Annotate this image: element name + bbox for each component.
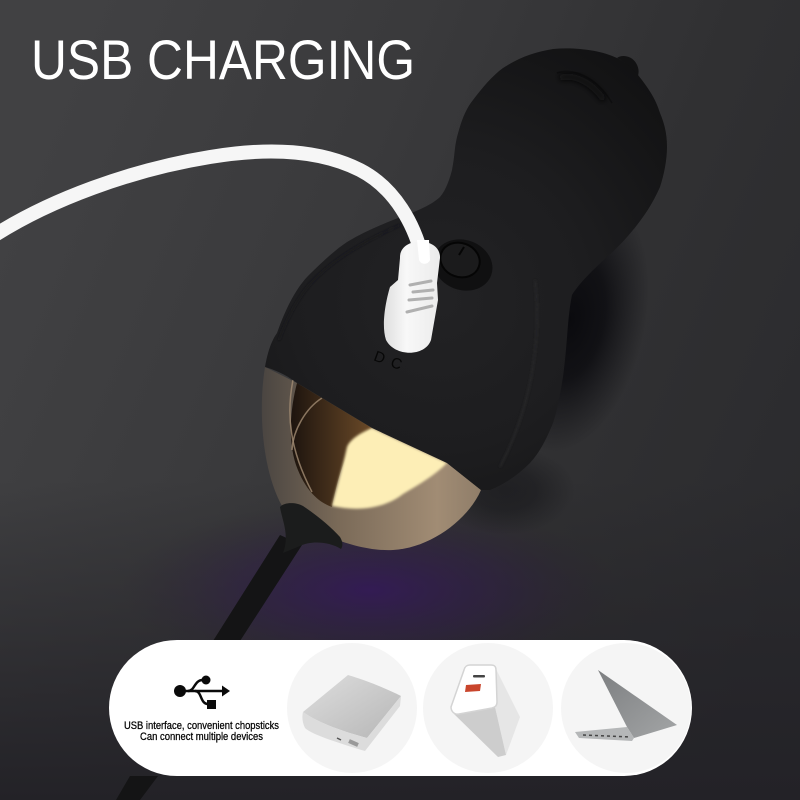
- device: gold base: [262, 367, 481, 550]
- ear: [557, 71, 612, 103]
- usb caption: USB interface, convenient chopsticks: [124, 720, 279, 732]
- white USB cable: [0, 151, 423, 260]
- panel: compatible devices: [109, 640, 692, 776]
- gold reflection: glowing highlight: [332, 428, 447, 509]
- usb caption: [124, 720, 279, 743]
- circle: laptop: [561, 643, 691, 773]
- circle: wall charger: [423, 643, 553, 773]
- device: silicone body and head: [265, 48, 667, 490]
- gold reflection: dark inner: [291, 383, 372, 507]
- circle: power bank: [287, 643, 417, 773]
- tail stem of device: [116, 535, 302, 800]
- usb caption: Can connect multiple devices: [140, 731, 263, 743]
- side crease: [500, 280, 537, 467]
- DC plug: [384, 240, 440, 353]
- tail flare: [280, 503, 342, 553]
- DC label: DC: [372, 348, 411, 376]
- icon: usb symbol: [174, 676, 230, 709]
- body rim fold: [279, 225, 400, 340]
- nub on head: [617, 56, 639, 76]
- power button: [426, 231, 500, 299]
- title: USB CHARGING: [31, 28, 415, 91]
